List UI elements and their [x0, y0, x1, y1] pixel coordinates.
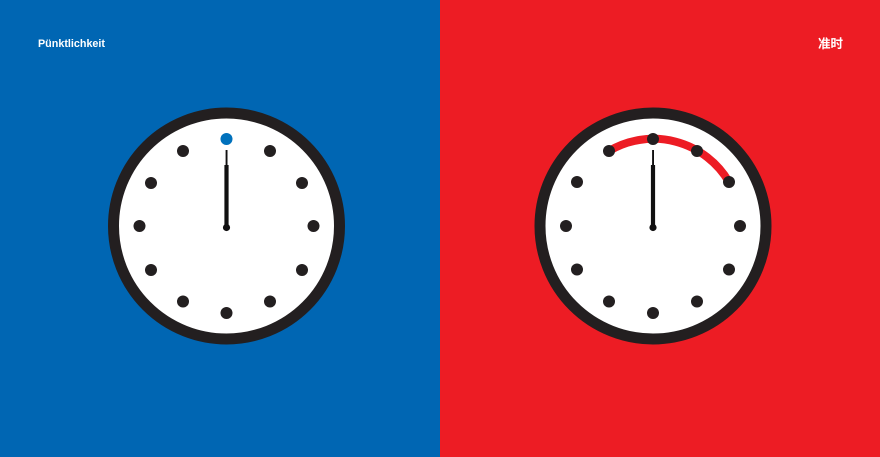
hour dots: [560, 133, 746, 319]
clock hands: [223, 150, 230, 231]
clock: on-time exactly at twelve: [114, 113, 340, 339]
panel: red background (Chinese): [440, 0, 880, 457]
heading: 准时: 准时: [818, 36, 844, 51]
blue twelve o'clock dot: [220, 133, 232, 145]
clock face: [540, 113, 766, 339]
heading: Pünktlichkeit: Pünktlichkeit: [38, 38, 105, 50]
clock hands: [649, 150, 657, 231]
panel: blue background (German): [0, 0, 440, 457]
clock face: [114, 113, 340, 339]
red tolerance arc: [609, 139, 729, 182]
clock: flexible arc around twelve: [540, 113, 766, 339]
hour dots: [134, 145, 320, 319]
